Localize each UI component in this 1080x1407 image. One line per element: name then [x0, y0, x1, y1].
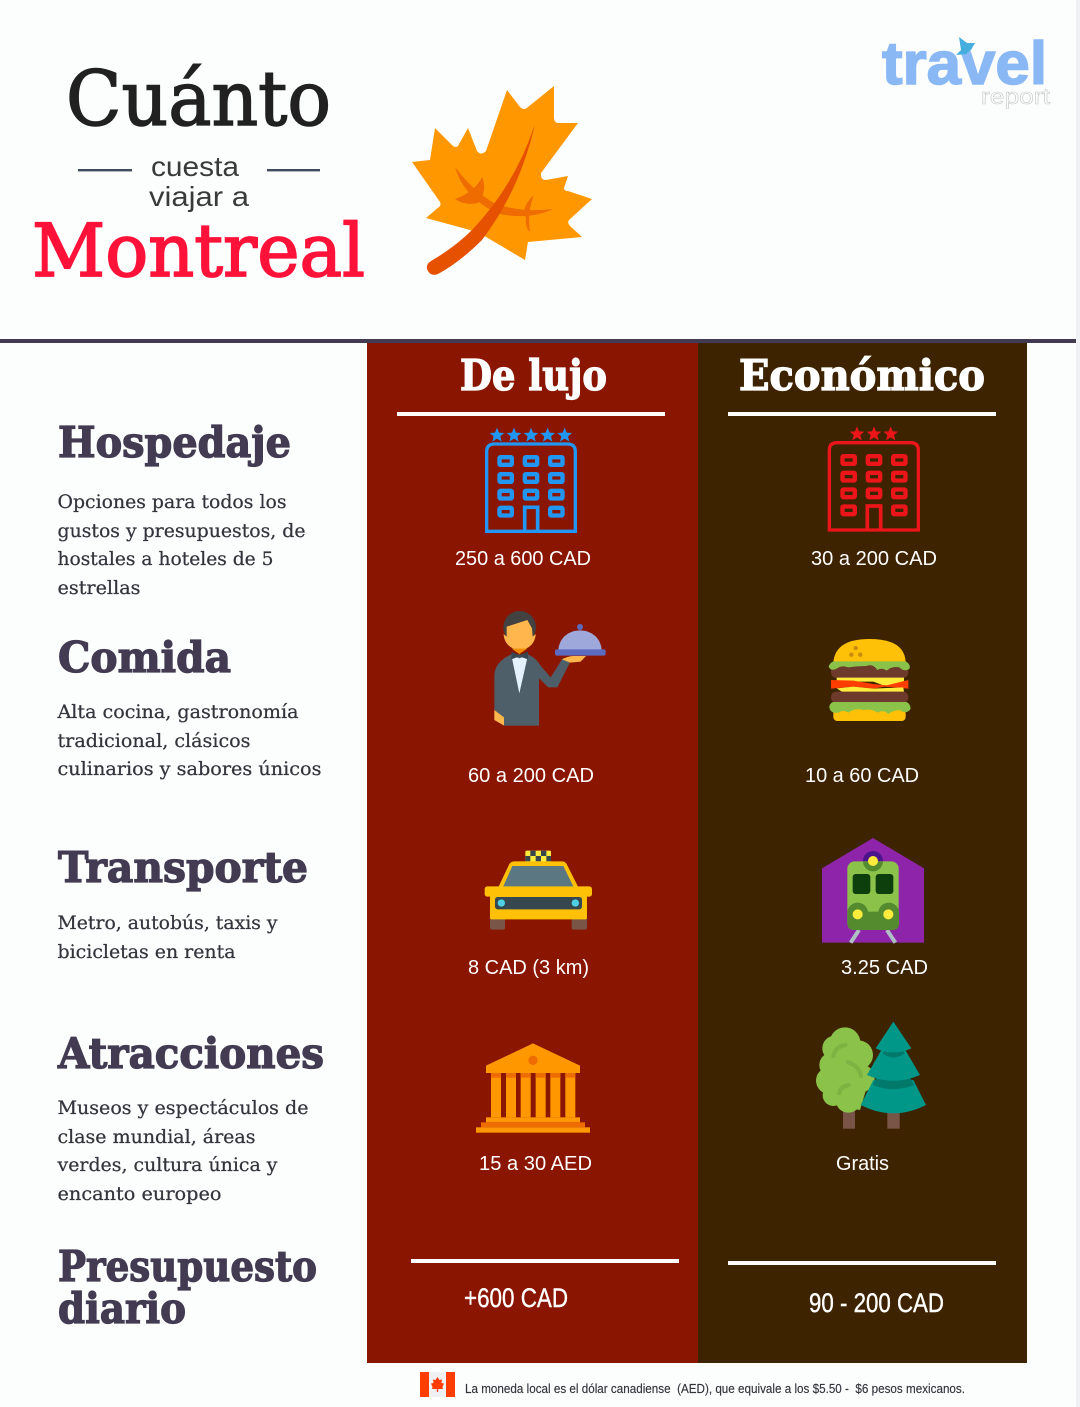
icon: waiter with cloche: [494, 611, 606, 726]
panel: Transporte text: Metro, autobús, taxis y: [58, 912, 278, 934]
panel: Comida text: Alta cocina, gastronomía: [56, 701, 299, 723]
heading: De lujo: De lujo: [460, 351, 607, 400]
price labels: Gratis: [836, 1152, 889, 1175]
title: Cuánto: [66, 54, 331, 143]
icon: three star hotel: [829, 426, 918, 530]
panel: budget column: [698, 343, 1027, 1363]
icon: Canadian flag: [420, 1372, 455, 1397]
price labels: 10 a 60 CAD: [805, 764, 919, 787]
price labels: 250 a 600 CAD: [455, 547, 591, 570]
daily budget luxury: +600 CAD: [464, 1283, 568, 1313]
panel: Atracciones text: encanto europeo: [58, 1183, 222, 1205]
panel: Presupuesto diario heading: diario: [58, 1284, 186, 1333]
panel: Hospedaje text: hostales a hoteles de 5: [58, 548, 274, 570]
daily budget economy: 90 - 200 CAD: [809, 1288, 944, 1318]
panel: Transporte text: Transporte: [58, 843, 308, 892]
price labels: 30 a 200 CAD: [811, 547, 937, 570]
panel: Hospedaje text: estrellas: [58, 577, 140, 599]
icon: five star hotel: [487, 428, 575, 531]
panel: luxury column: [367, 343, 698, 1363]
icon: trees: [816, 1022, 926, 1129]
price labels: 3.25 CAD: [841, 956, 928, 979]
panel: Atracciones text: Atracciones: [57, 1029, 324, 1078]
price labels: 60 a 200 CAD: [468, 764, 594, 787]
title: [32, 54, 365, 294]
panel: Atracciones text: clase mundial, áreas: [58, 1126, 256, 1148]
logo: travel report: report: [981, 84, 1050, 109]
icon: burger: [829, 639, 911, 721]
panel: Comida text: tradicional, clásicos: [58, 730, 250, 752]
panel: Hospedaje text: [58, 418, 306, 599]
icon: maple leaf: [412, 86, 592, 275]
title: cuesta: [151, 151, 239, 182]
icon: train station: [822, 838, 924, 943]
panel: Comida text: Comida: [58, 633, 231, 682]
title: Montreal: [32, 209, 365, 294]
price labels: 8 CAD (3 km): [468, 956, 589, 979]
panel: Hospedaje text: Opciones para todos los: [58, 491, 286, 513]
panel: Atracciones text: [57, 1029, 324, 1205]
panel: Comida text: [56, 633, 322, 780]
logo: travel report: travel: [882, 30, 1047, 97]
daily budget economy: [728, 1261, 996, 1318]
price labels: [455, 547, 937, 1175]
title: viajar a: [149, 181, 249, 212]
panel: Hospedaje text: Hospedaje: [58, 418, 291, 467]
footnote: La moneda local es el dólar canadiense (AED), que equivale a los $5.50 - $6 pesos mexicanos.: [465, 1381, 965, 1396]
panel: Transporte text: [58, 843, 308, 963]
panel: Atracciones text: verdes, cultura única y: [57, 1154, 278, 1176]
icon: taxi: [485, 851, 592, 930]
icon: museum building: [476, 1043, 590, 1133]
panel: Presupuesto diario heading: Presupuesto: [58, 1242, 317, 1291]
panel: Transporte text: bicicletas en renta: [58, 941, 236, 963]
panel: Comida text: culinarios y sabores únicos: [58, 758, 322, 780]
price labels: 15 a 30 AED: [479, 1152, 592, 1175]
panel: Presupuesto diario heading: [58, 1242, 317, 1333]
heading: De lujo: [397, 351, 665, 416]
panel: Atracciones text: Museos y espectáculos de: [58, 1097, 308, 1119]
heading: Económico: Económico: [739, 351, 985, 400]
daily budget luxury: [411, 1259, 679, 1313]
panel: Hospedaje text: gustos y presupuestos, de: [58, 520, 306, 542]
